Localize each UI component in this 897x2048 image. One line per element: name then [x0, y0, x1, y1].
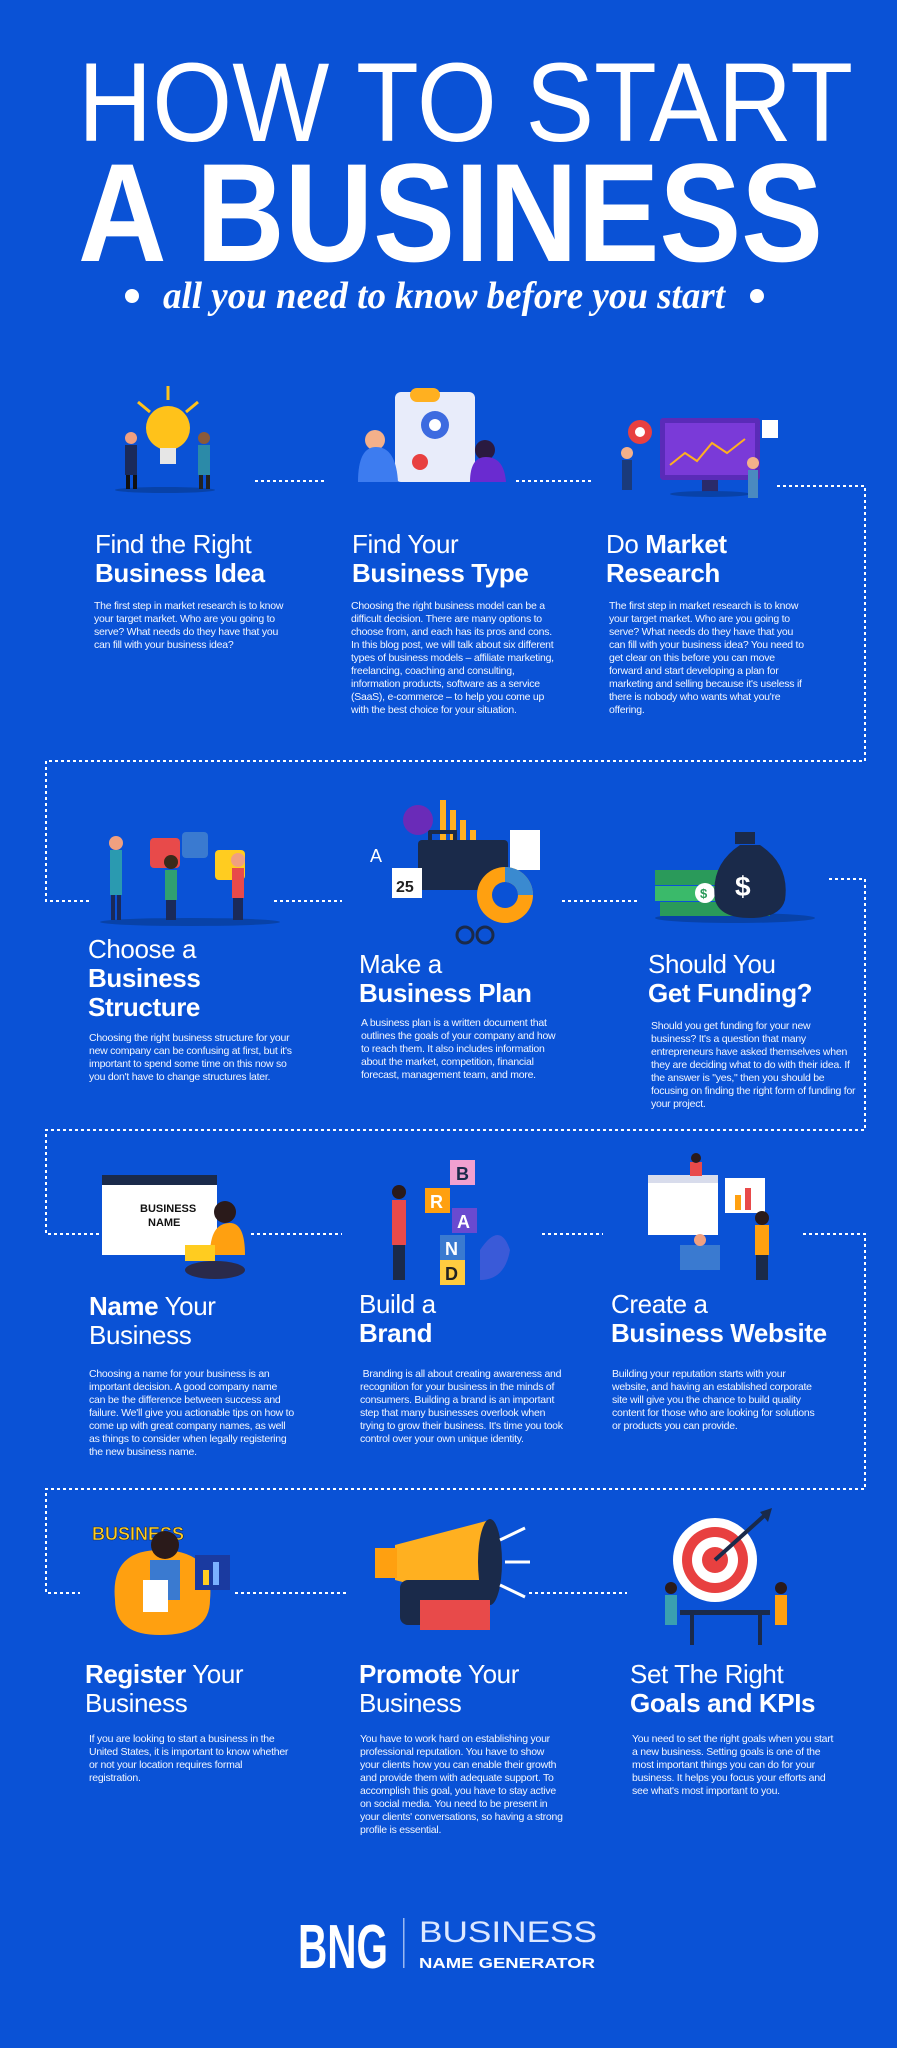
heading: promote your business: Business — [359, 1688, 461, 1718]
icon: brand blocks: B — [456, 1164, 469, 1184]
text: business type: Choosing the right business model can be a difficult decision. There are many options to choose from, and each has its pros and cons. In this blog post, we will talk about six different types of business models – affiliate marketing, freelancing, coaching and consulting, information products, software as a service (SaaS), e-commerce – to help you come up with the best choice for your situation. — [351, 600, 554, 716]
heading: find the right business idea — [95, 529, 266, 588]
heading: promote your business — [359, 1659, 519, 1718]
heading: find the right business idea: Find the Right — [95, 529, 251, 559]
icon: target goals — [665, 1508, 787, 1645]
icon: funding money: $ — [735, 871, 751, 902]
footer logo: BUSINESS — [419, 1916, 597, 1949]
heading: create a business website — [611, 1289, 827, 1348]
icon: name business: BUSINESS — [140, 1203, 196, 1215]
text: market research: The first step in market research is to know your target market. Who are you going to serve? What needs do they have that you can fill with your business idea? You need to get clear on this before you can move forward and start developing a plan for marketing and selling because it's useless if there is nobody who wants what you're offering. — [609, 600, 804, 716]
heading: make a business plan: Business Plan — [359, 978, 532, 1008]
text: register: If you are looking to start a business in the United States, it is important to know whether or not your location requires formal registration. — [89, 1733, 288, 1784]
heading: name your business: Business — [89, 1320, 191, 1350]
heading: should you get funding: Should You — [648, 949, 776, 979]
icon: funding money — [655, 832, 815, 923]
footer logo — [298, 1913, 597, 1982]
heading: choose a business structure — [88, 934, 200, 1022]
heading: build a brand — [359, 1289, 436, 1348]
heading: register your business — [85, 1659, 244, 1718]
icon: register business: BUSINESS — [92, 1524, 184, 1544]
icon: brand blocks: D — [445, 1264, 458, 1284]
icon: business website — [648, 1153, 769, 1280]
title — [78, 40, 853, 291]
heading: build a brand: Build a — [359, 1289, 436, 1319]
icon: funding money: $ — [700, 886, 708, 901]
heading: create a business website: Business Website — [611, 1318, 827, 1348]
heading: name your business — [89, 1291, 216, 1350]
heading: do market research: Do Market — [606, 529, 727, 559]
icon: megaphone promote — [375, 1519, 530, 1630]
icon: register business — [92, 1524, 230, 1635]
heading: should you get funding — [648, 949, 812, 1008]
heading: promote your business: Promote Your — [359, 1659, 519, 1689]
icon: business type — [358, 388, 506, 482]
text: funding: Should you get funding for your new business? It's a question that many entrepreneurs have asked themselves when they are deciding what to do with their idea. If the answer is "yes," then you should be focusing on finding the right form of funding for your project. — [651, 1020, 855, 1110]
icon: brand blocks: A — [457, 1212, 470, 1232]
text: business structure: Choosing the right business structure for your new company can be confusing at first, but it's important to spend some time on this now so you don't have to change structures later. — [89, 1032, 292, 1083]
heading: find your business type — [352, 529, 528, 588]
icon: business plan: 25 — [396, 879, 414, 896]
icon: brand blocks — [392, 1160, 510, 1285]
heading: name your business: Name Your — [89, 1291, 216, 1321]
heading: do market research: Research — [606, 558, 720, 588]
icon: brand blocks: N — [445, 1239, 458, 1259]
icon: name business — [102, 1175, 245, 1279]
heading: should you get funding: Get Funding? — [648, 978, 812, 1008]
icon: name business: NAME — [148, 1217, 180, 1229]
heading: do market research — [606, 529, 727, 588]
icon: brand blocks: R — [430, 1192, 443, 1212]
icon: business plan: A — [370, 846, 382, 866]
icon: puzzle structure — [100, 832, 280, 926]
footer logo: BNG — [298, 1913, 388, 1982]
footer logo: NAME GENERATOR — [419, 1955, 595, 1972]
text: website: Building your reputation starts with your website, and having an established corporate site will give you the chance to build quality content for those who are looking for solutions or products you can provide. — [612, 1368, 814, 1432]
text: goals: You need to set the right goals when you start a new business. Setting goals is one of the most important things you can do for your business. It helps you focus your efforts and see what's most important to you. — [632, 1733, 833, 1797]
text: promote: You have to work hard on establishing your professional reputation. You have to show your clients how you can enable their growth and provide them with adequate support. To accomplish this goal, you have to stay active on social media. You need to be present in your clients' conversations, so having a strong profile is essential. — [360, 1733, 563, 1836]
heading: choose a business structure: Business — [88, 963, 200, 993]
text: business plan: A business plan is a written document that outlines the goals of your company and how to reach them. It also includes information about the market, competition, financial forecast, management team, and more. — [361, 1017, 555, 1081]
subtitle: all you need to know before you start — [163, 275, 726, 317]
heading: register your business: Register Your — [85, 1659, 243, 1689]
heading: make a business plan: Make a — [359, 949, 442, 979]
text: name business: Choosing a name for your business is an important decision. A good company name can be the difference between success and failure. We'll give you actionable tips on how to come up with great company names, as well as things to consider when legally registering the new business name. — [89, 1368, 294, 1458]
icon: market research — [621, 418, 778, 498]
heading: find the right business idea: Business Idea — [95, 558, 265, 588]
heading: set the right goals and kpis — [630, 1659, 815, 1718]
text: brand: Branding is all about creating awareness and recognition for your business in the minds of consumers. Building a brand is an important step that many businesses overlook when trying to grow their business. It's time you took control over your own unique identity. — [360, 1368, 563, 1445]
text: business idea: The first step in market research is to know your target market. Who are you going to serve? What needs do they have that you can fill with your business idea? — [94, 600, 283, 651]
heading: find your business type: Business Type — [352, 558, 528, 588]
heading: build a brand: Brand — [359, 1318, 432, 1348]
title: HOW TO START — [78, 40, 853, 165]
heading: set the right goals and kpis: Set The Right — [630, 1659, 783, 1689]
icon: light bulb idea — [115, 386, 215, 493]
heading: choose a business structure: Choose a — [88, 934, 196, 964]
heading: choose a business structure: Structure — [88, 992, 200, 1022]
heading: find your business type: Find Your — [352, 529, 458, 559]
heading: register your business: Business — [85, 1688, 187, 1718]
heading: create a business website: Create a — [611, 1289, 708, 1319]
heading: make a business plan — [359, 949, 532, 1008]
icon: business plan — [370, 800, 540, 943]
heading: set the right goals and kpis: Goals and KPIs — [630, 1688, 815, 1718]
